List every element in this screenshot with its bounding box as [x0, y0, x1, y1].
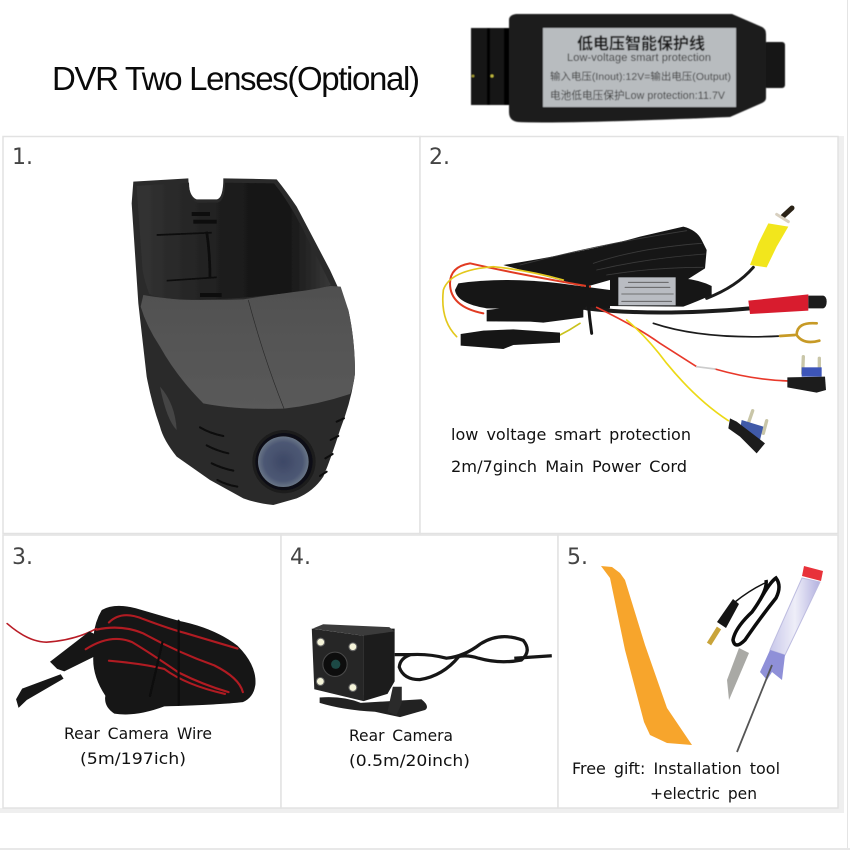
fuse tap red [803, 357, 819, 373]
red connector [748, 294, 808, 314]
dark wire mass [503, 227, 707, 287]
caption panel 5: Free gift: Installation tool [572, 759, 780, 778]
protection module photo: Low-voltage smart protection [567, 52, 711, 64]
caption panel 4: Rear Camera [349, 726, 453, 745]
protection module photo: 低电压智能保护线 [577, 34, 705, 53]
panel 3: rear camera wire [3, 535, 281, 808]
caption panel 4: (0.5m/20inch) [349, 751, 470, 770]
wire coil [7, 606, 256, 714]
number 3: 3. [12, 545, 33, 570]
panel 5: free gift tools [558, 535, 838, 808]
number 2: 2. [429, 145, 450, 170]
protection module photo [471, 14, 785, 122]
caption panel 2: 2m/7ginch Main Power Cord [451, 457, 687, 476]
number 1: 1. [12, 145, 33, 170]
caption panel 2 [451, 425, 691, 476]
caption panel 3: (5m/197ich) [80, 749, 186, 768]
protection module photo: 输入电压(Inout):12V=输出电压(Output) [550, 70, 731, 83]
caption panel 3: Rear Camera Wire [64, 724, 212, 743]
test lead with clip [709, 578, 779, 700]
power cord harness [443, 208, 827, 453]
panel 4: rear camera [281, 535, 558, 808]
number 4: 4. [290, 545, 311, 570]
fuse tap yellow [748, 411, 767, 433]
caption panel 5: +electric pen [650, 784, 757, 803]
caption panel 4 [349, 726, 470, 770]
panel 2: main power cord [420, 136, 838, 534]
caption panel 5 [572, 759, 780, 803]
camera [312, 624, 552, 717]
protection module photo: 电池低电压保护Low protection:11.7V [550, 89, 726, 102]
caption panel 3 [64, 724, 212, 768]
lens [252, 430, 316, 493]
inline module [610, 275, 712, 307]
pry tool [601, 566, 692, 745]
electric pen [737, 566, 823, 752]
dash camera body [132, 178, 355, 505]
caption panel 2: low voltage smart protection [451, 425, 691, 444]
panel 1: DVR body [3, 136, 420, 534]
yellow RCA connector [750, 223, 788, 267]
number 5: 5. [567, 545, 588, 570]
title: DVR Two Lenses(Optional) [52, 60, 420, 97]
spade terminal [780, 323, 819, 342]
fuse holders [487, 302, 583, 323]
